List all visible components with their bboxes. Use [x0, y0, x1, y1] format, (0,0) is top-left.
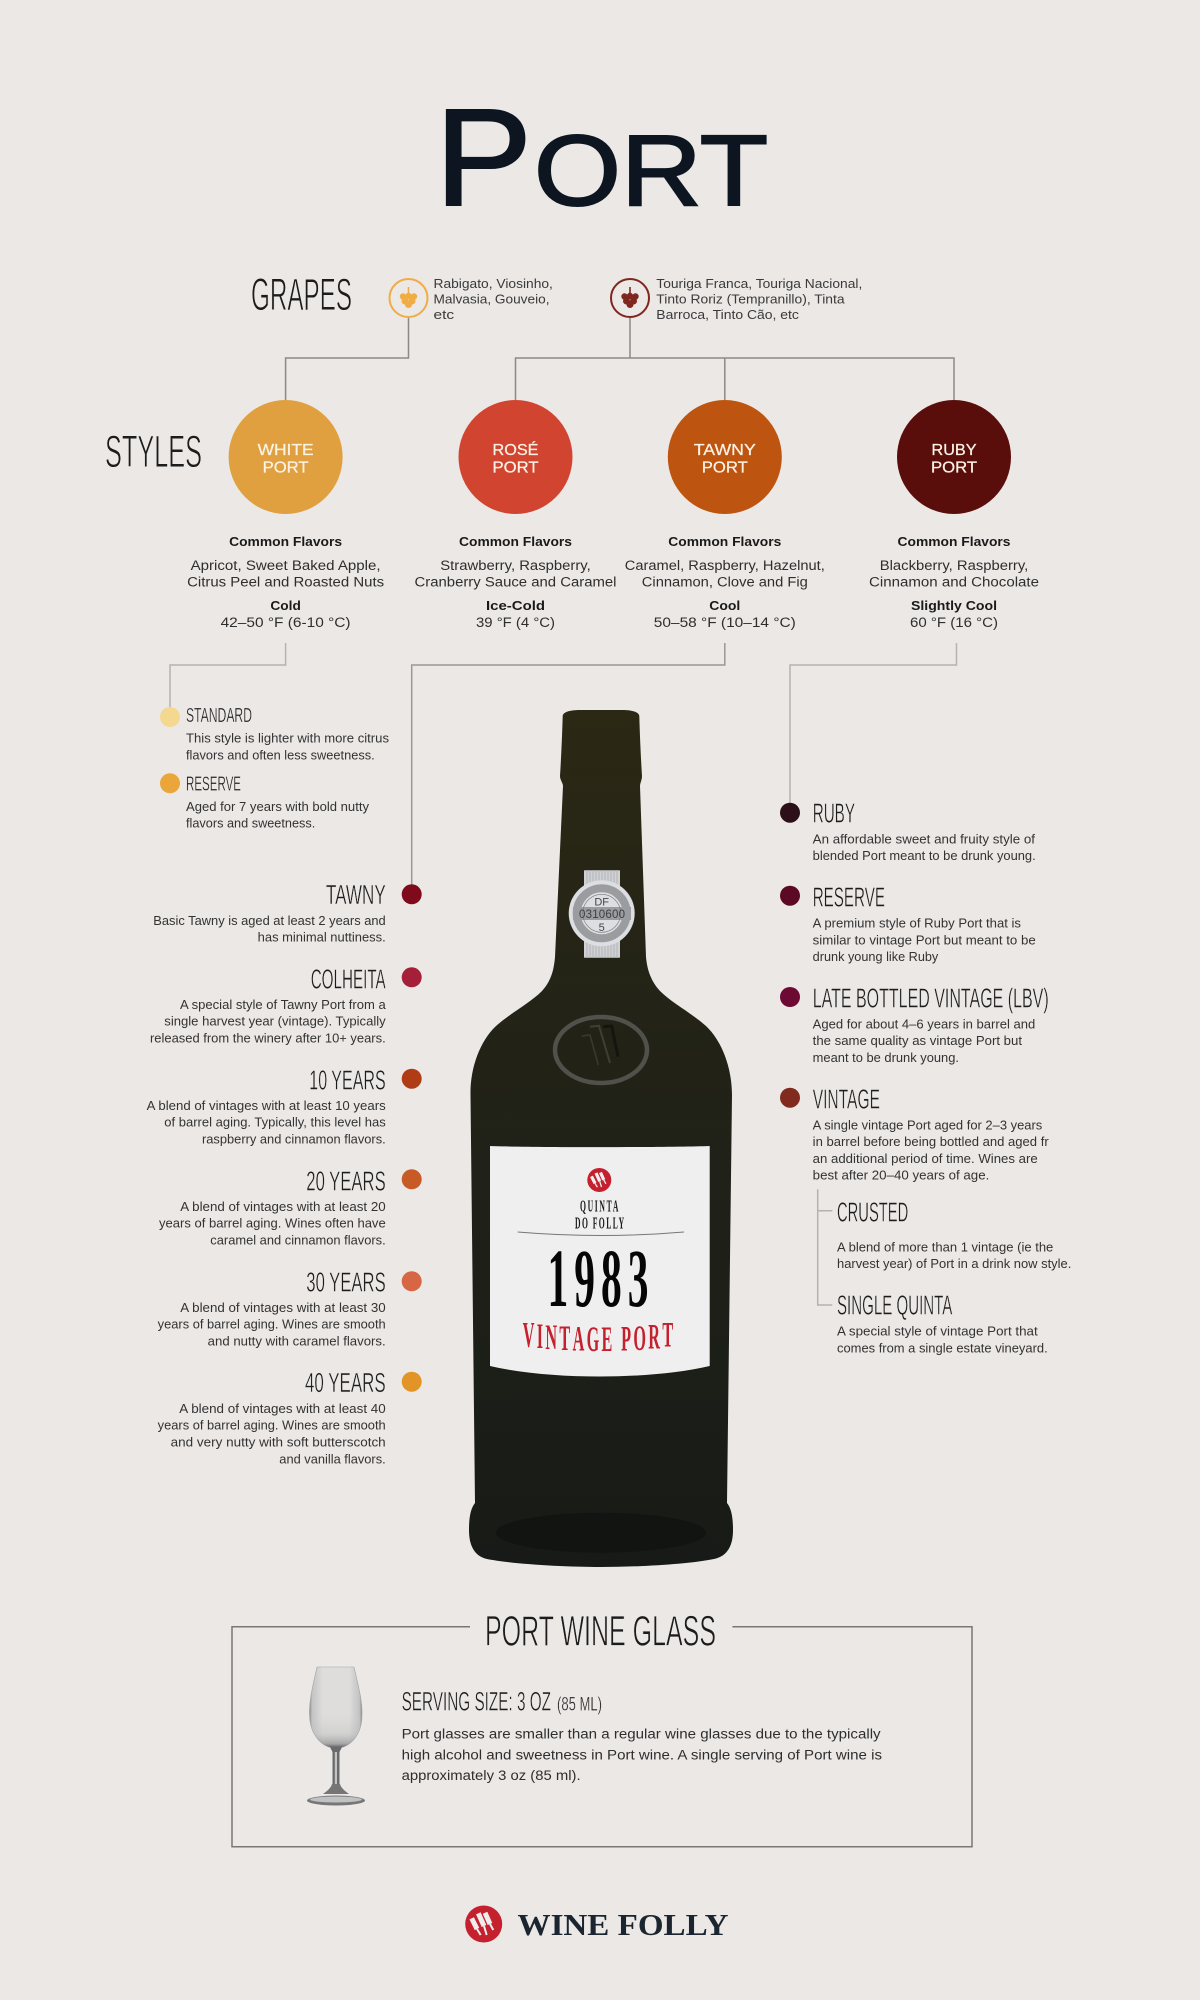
ruby style: late bottled vintage: Aged for about 4–6 years in barrel and: [813, 1017, 1035, 1031]
tawny style: 20 years: 20 YEARS: [306, 1165, 386, 1196]
rose port circle: PORT: [492, 460, 539, 476]
vintage sub-style: crusted: [837, 1196, 1071, 1271]
connector: grapes to styles: [286, 318, 954, 400]
icon: wine folly mark: [465, 1906, 502, 1942]
tawny style: colheita: released from the winery after 10+ years.: [150, 1031, 386, 1045]
heading: styles: STYLES: [105, 426, 202, 477]
text: white grape names: [434, 277, 553, 322]
tawny port flavors: Cool: [709, 598, 740, 613]
vintage sub-style: crusted: CRUSTED: [837, 1196, 908, 1227]
ruby style: vintage: VINTAGE: [813, 1084, 880, 1115]
footer logo: wine folly: [465, 1906, 728, 1942]
glass description: Port glasses are smaller than a regular wine glasses due to the typically: [402, 1726, 881, 1741]
ruby port flavors: Slightly Cool: [911, 598, 997, 613]
text: red grape names: [656, 277, 862, 322]
ruby style: late bottled vintage: the same quality as vintage Port but: [813, 1034, 1023, 1048]
ruby style: ruby: blended Port meant to be drunk young.: [813, 849, 1036, 863]
ruby port circle: RUBY: [932, 442, 977, 459]
tawny style: 30 years: 30 YEARS: [306, 1266, 386, 1297]
tawny style: 30 years: years of barrel aging. Wines are smooth: [158, 1318, 386, 1332]
ruby port circle: [897, 400, 1011, 514]
rose port circle: ROSÉ: [492, 440, 538, 459]
ruby style: ruby: An affordable sweet and fruity style of: [813, 832, 1036, 846]
white port flavors: 42–50 °F (6-10 °C): [221, 615, 351, 630]
white style: standard: STANDARD: [186, 704, 252, 727]
ruby style: late bottled vintage: [780, 983, 1049, 1065]
tawny port flavors: Common Flavors: [668, 534, 781, 549]
tawny style: 10 years: 10 YEARS: [309, 1064, 386, 1095]
style: ruby port: [869, 400, 1039, 630]
tawny style: colheita: A special style of Tawny Port from a: [180, 998, 386, 1012]
tawny style: tawny: TAWNY: [326, 879, 386, 910]
vintage sub-style: crusted: harvest year) of Port in a drink now style.: [837, 1257, 1071, 1271]
text: red grape names: Tinto Roriz (Tempranillo), Tinta: [656, 292, 845, 306]
connector: ruby port to ruby styles: [790, 643, 956, 804]
label: quinta do folly: DO FOLLY: [575, 1213, 626, 1233]
ruby port flavors: 60 °F (16 °C): [910, 615, 998, 630]
glass description: approximately 3 oz (85 ml).: [402, 1768, 581, 1783]
label: vintage port: VINTAGE PORT: [523, 1316, 675, 1360]
tawny style: colheita: single harvest year (vintage). Typically: [164, 1015, 386, 1029]
tawny style: 40 years: A blend of vintages with at least 40: [179, 1402, 386, 1416]
style: rose port: [414, 400, 616, 630]
tawny style: 40 years: [158, 1367, 422, 1466]
panel heading: PORT WINE GLASS: [485, 1609, 716, 1656]
ruby style: vintage: [780, 1084, 1049, 1183]
white style: reserve: flavors and sweetness.: [186, 817, 315, 831]
white style: standard: [160, 704, 389, 762]
tawny style: 20 years: years of barrel aging. Wines often have: [159, 1217, 386, 1231]
white port circle: [229, 400, 343, 514]
ruby style: reserve: similar to vintage Port but meant to be: [813, 933, 1036, 947]
serving size heading: (85 ML): [557, 1695, 602, 1716]
base shadow: [496, 1513, 706, 1553]
bottle silhouette: [469, 710, 733, 1567]
tawny port circle: TAWNY: [694, 442, 756, 459]
seal strip: [584, 870, 620, 958]
ruby style: reserve: [780, 882, 1036, 964]
text: white grape names: Malvasia, Gouveio,: [434, 292, 550, 306]
text: white grape names: Rabigato, Viosinho,: [434, 277, 553, 291]
glass description: [402, 1726, 882, 1783]
tawny port flavors: 50–58 °F (10–14 °C): [654, 615, 796, 630]
white port circle: PORT: [263, 460, 309, 476]
white port flavors: Cold: [270, 598, 301, 613]
vintage sub-style: crusted: A blend of more than 1 vintage (ie the: [837, 1240, 1053, 1254]
tawny port flavors: [625, 534, 825, 630]
tawny style: 10 years: [147, 1064, 422, 1146]
ruby style: reserve: RESERVE: [813, 882, 885, 913]
ruby style: ruby: RUBY: [813, 797, 855, 828]
rose port flavors: Cranberry Sauce and Caramel: [414, 574, 616, 590]
tawny style: 40 years: 40 YEARS: [305, 1367, 386, 1398]
seal: 5: [599, 922, 605, 934]
bottle: [469, 710, 733, 1567]
white style: reserve: Aged for 7 years with bold nutty: [186, 800, 370, 814]
ruby port flavors: Cinnamon and Chocolate: [869, 574, 1039, 590]
vintage sub-style: single quinta: comes from a single estate vineyard.: [837, 1341, 1048, 1355]
white style: reserve: [160, 773, 370, 831]
tawny style: 20 years: [159, 1165, 422, 1247]
ruby style: ruby: [780, 797, 1036, 863]
tawny style: 10 years: of barrel aging. Typically, this level has: [164, 1116, 386, 1130]
glass description: high alcohol and sweetness in Port wine. A single serving of Port wine is: [402, 1747, 882, 1762]
white style: standard: flavors and often less sweetness.: [186, 748, 375, 762]
white port flavors: Apricot, Sweet Baked Apple,: [191, 558, 381, 573]
ruby port flavors: [869, 534, 1039, 630]
text: red grape names: Touriga Franca, Touriga Nacional,: [656, 277, 862, 291]
rose port flavors: Common Flavors: [459, 534, 572, 549]
tawny style: tawny: Basic Tawny is aged at least 2 years and: [153, 914, 386, 928]
tawny port flavors: Caramel, Raspberry, Hazelnut,: [625, 558, 825, 573]
tawny style: 40 years: and very nutty with soft butterscotch: [171, 1435, 386, 1449]
white port flavors: Common Flavors: [229, 534, 342, 549]
rose port flavors: Ice-Cold: [486, 598, 545, 613]
tawny style: tawny: has minimal nuttiness.: [258, 931, 386, 945]
serving size heading: SERVING SIZE: 3 OZ: [402, 1687, 551, 1717]
seal: [569, 880, 635, 946]
ruby port circle: PORT: [931, 460, 977, 476]
white port flavors: Citrus Peel and Roasted Nuts: [187, 574, 384, 590]
tawny port flavors: Cinnamon, Clove and Fig: [642, 574, 808, 590]
tawny style: colheita: [150, 963, 422, 1045]
tawny style: colheita: COLHEITA: [311, 963, 386, 994]
style: white port: [187, 400, 384, 630]
rose port flavors: 39 °F (4 °C): [476, 615, 555, 630]
rose port flavors: Strawberry, Raspberry,: [440, 558, 591, 573]
label logo: [587, 1168, 611, 1192]
ruby port flavors: Blackberry, Raspberry,: [880, 558, 1028, 573]
label: quinta do folly: [575, 1196, 626, 1233]
ruby style: reserve: drunk young like Ruby: [813, 950, 939, 964]
label: quinta do folly: QUINTA: [580, 1196, 620, 1216]
tawny style: 40 years: and vanilla flavors.: [279, 1452, 386, 1466]
style: tawny port: [625, 400, 825, 630]
rose port flavors: [414, 534, 616, 630]
grapes: white varieties: [390, 277, 553, 322]
vintage sub-style: single quinta: A special style of vintage Port that: [837, 1325, 1038, 1339]
ruby style: vintage: an additional period of time. Wines are: [813, 1152, 1038, 1166]
ruby port flavors: Common Flavors: [898, 534, 1010, 549]
tawny port circle: PORT: [702, 460, 748, 476]
icon: red grape: [611, 279, 649, 317]
seal: 0310600: [579, 909, 625, 921]
connector: tawny port to tawny styles: [412, 643, 725, 885]
ruby style: late bottled vintage: meant to be drunk young.: [813, 1051, 959, 1065]
tawny style: 20 years: caramel and cinnamon flavors.: [210, 1233, 386, 1247]
bottle label: [490, 1146, 710, 1376]
vintage sub-style: single quinta: [837, 1290, 1048, 1355]
tawny style: 30 years: [158, 1266, 422, 1348]
tawny port circle: [668, 400, 782, 514]
seal: DF: [594, 897, 609, 909]
connector: vintage sub-styles: [818, 1189, 832, 1305]
white port circle: WHITE: [258, 442, 314, 459]
heading: grapes: GRAPES: [251, 269, 352, 320]
ruby style: reserve: A premium style of Ruby Port that is: [813, 916, 1021, 930]
icon: white grape: [390, 279, 428, 317]
title: ORT: [534, 115, 768, 227]
rose port circle: [458, 400, 572, 514]
label: vintage year: 1983: [548, 1234, 654, 1325]
wordmark: WINE FOLLY: [518, 1907, 728, 1942]
tawny style: 40 years: years of barrel aging. Wines are smooth: [158, 1419, 386, 1433]
icon: port glass: [307, 1667, 365, 1806]
white style: standard: This style is lighter with more citrus: [186, 732, 389, 746]
connector: white port to white styles: [170, 643, 286, 708]
grapes: red varieties: [611, 277, 862, 322]
tawny style: 30 years: A blend of vintages with at least 30: [180, 1301, 386, 1315]
ruby style: vintage: A single vintage Port aged for 2–3 years: [813, 1118, 1042, 1132]
tawny style: tawny: [153, 879, 422, 945]
tawny style: 10 years: A blend of vintages with at least 10 years: [147, 1099, 386, 1113]
title: P: [435, 81, 532, 235]
vintage sub-style: single quinta: SINGLE QUINTA: [837, 1290, 953, 1321]
tawny style: 20 years: A blend of vintages with at least 20: [180, 1200, 386, 1214]
white style: reserve: RESERVE: [186, 773, 241, 796]
panel: port wine glass: [232, 1609, 972, 1847]
tawny style: 30 years: and nutty with caramel flavors.: [208, 1334, 386, 1348]
ruby style: vintage: best after 20–40 years of age.: [813, 1169, 989, 1183]
white port flavors: [187, 534, 384, 630]
text: white grape names: etc: [434, 308, 454, 322]
embossed logo: [555, 1017, 647, 1083]
text: red grape names: Barroca, Tinto Cão, etc: [656, 308, 799, 322]
ruby style: vintage: in barrel before being bottled and aged fr: [813, 1135, 1049, 1149]
tawny style: 10 years: raspberry and cinnamon flavors.: [202, 1132, 386, 1146]
